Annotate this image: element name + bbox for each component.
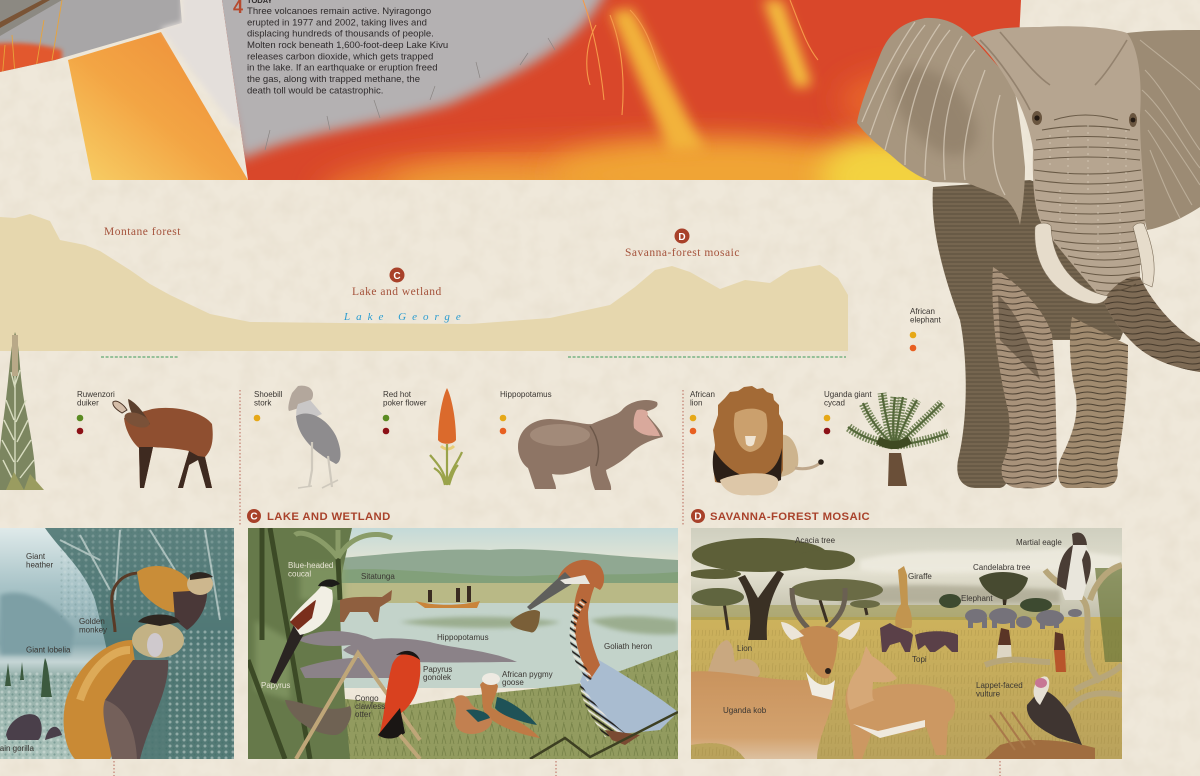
giraffe	[895, 566, 912, 628]
hills	[342, 549, 678, 576]
species: African lion: lion	[690, 398, 702, 408]
papyrus gonolek	[378, 651, 420, 759]
wooden branch frame	[296, 653, 420, 759]
species: hippopotamus: Hippopotamus	[500, 390, 552, 399]
elephant herd	[965, 608, 1082, 629]
species: Ruwenzori duiker: Ruwenzori	[77, 390, 115, 399]
near front leg	[992, 267, 1057, 488]
foreground grass	[345, 650, 678, 759]
species: African lion: African	[690, 390, 715, 399]
today text block: death toll would be catastrophic.	[247, 85, 383, 96]
label: Savanna-forest mosaic with marker D	[625, 228, 740, 259]
african pygmy geese	[453, 673, 540, 738]
species: shoebill stork	[254, 386, 340, 488]
panel: savanna-forest mosaic scene: Lappet-faced	[976, 681, 1023, 690]
sitatunga	[340, 590, 392, 622]
label: Montane forest: Montane forest	[104, 226, 181, 238]
section heading: lake and wetland: LAKE AND WETLAND	[267, 511, 391, 523]
panel: savanna-forest mosaic scene: Martial eagle	[1016, 538, 1062, 547]
candelabra and background trees	[939, 572, 1052, 612]
panel: lake and wetland scene: Papyrus	[261, 681, 290, 690]
species: Uganda giant cycad: cycad	[824, 398, 845, 408]
panel: lake and wetland scene: gonolek	[423, 673, 452, 682]
panel: lake and wetland scene: Hippopotamus	[437, 633, 489, 642]
lions	[708, 640, 760, 677]
today text block: Three volcanoes remain active. Nyiragongo	[247, 6, 431, 17]
panel: lake and wetland scene: Blue-headed	[288, 561, 333, 570]
right ear	[1127, 30, 1200, 230]
species: giant lobelia	[0, 332, 44, 490]
panel: savanna-forest mosaic scene: Topi	[912, 655, 927, 664]
panel: lake and wetland scene: Sitatunga	[361, 572, 395, 581]
panel: lake and wetland scene: otter	[355, 710, 371, 719]
panel: savanna-forest mosaic scene: Elephant	[961, 594, 993, 603]
panel: savanna-forest mosaic scene: Lion	[737, 644, 752, 653]
acacia trees	[689, 538, 883, 640]
elevation profile terrain	[0, 214, 848, 351]
tusks	[1035, 223, 1154, 304]
congo clawless otter	[285, 700, 351, 735]
label: Savanna-forest mosaic with marker D: Savanna-forest mosaic	[625, 247, 740, 259]
lava veins	[583, 0, 818, 115]
species: Ruwenzori duiker: duiker	[77, 398, 99, 408]
label: Lake George: Lake George	[343, 311, 467, 323]
papyrus thicket	[248, 528, 352, 759]
species: shoebill stork: Shoebill	[254, 390, 283, 399]
species: African lion	[690, 386, 824, 495]
panel: savanna-forest mosaic scene: Uganda kob	[723, 706, 767, 715]
pale rock strip	[161, 0, 248, 132]
panel: montane forest scene: Golden	[79, 617, 105, 626]
panel: lake and wetland scene: coucal	[288, 570, 311, 578]
gorillas	[6, 714, 62, 740]
panel: montane forest scene: heather	[26, 560, 53, 570]
panel: montane forest scene	[0, 528, 234, 759]
today text block: displacing hundreds of thousands of people.	[247, 29, 434, 40]
today text block: Molten rock beneath 1,600-foot-deep Lake Kivu	[247, 40, 448, 51]
today text block: releases carbon dioxide, which gets trapped	[247, 51, 433, 62]
panel: savanna-forest mosaic scene	[689, 528, 1122, 759]
panel: lake and wetland scene	[248, 528, 678, 759]
panel: lake and wetland scene: clawless	[355, 702, 385, 711]
volcano cross-section illustration	[0, 0, 1021, 180]
panel: montane forest scene: monkey	[79, 626, 107, 634]
panel: savanna-forest mosaic scene: Giraffe	[908, 572, 932, 581]
hunters	[996, 628, 1066, 672]
uganda kob male	[691, 588, 860, 759]
today text block	[233, 0, 448, 96]
eyes	[1032, 111, 1042, 125]
label: Lake and wetland with marker C: C	[393, 271, 401, 282]
large golden monkey	[64, 614, 184, 759]
label: Lake and wetland with marker C: Lake and wetland	[352, 286, 442, 298]
water	[340, 603, 678, 688]
goliath heron	[510, 560, 678, 745]
species: shoebill stork: stork	[254, 398, 272, 408]
panel: montane forest scene: Giant lobelia	[26, 646, 71, 654]
species: African elephant	[857, 18, 1200, 488]
lappet-faced vulture	[985, 676, 1095, 759]
fallen and dead tree branches	[1095, 568, 1122, 662]
panel: savanna-forest mosaic scene: vulture	[976, 690, 1001, 698]
section heading: lake and wetland: C	[250, 512, 258, 522]
species: hippopotamus	[500, 390, 663, 490]
species: red hot poker flower: Red hot	[383, 390, 412, 399]
panel: lake and wetland scene: Congo	[355, 694, 379, 703]
left ear	[857, 18, 1025, 225]
species: Uganda giant cycad: Uganda giant	[824, 390, 872, 399]
main magma chamber	[222, 0, 1021, 180]
fishing boat	[415, 586, 480, 608]
dark fallen branch	[530, 712, 678, 759]
species: red hot poker flower	[383, 388, 462, 485]
species: African elephant: elephant	[910, 316, 941, 324]
label: Lake and wetland with marker C	[352, 268, 442, 298]
species: African elephant: African	[910, 307, 935, 316]
martial eagle	[1057, 532, 1091, 600]
far right leg	[1058, 317, 1128, 488]
panel: lake and wetland scene: goose	[502, 678, 524, 687]
panel: savanna-forest mosaic scene: Acacia tree	[795, 536, 836, 545]
uganda kob female	[845, 646, 955, 759]
panel: savanna-forest mosaic scene: Candelabra tree	[973, 563, 1031, 572]
blue-headed coucal	[270, 579, 340, 684]
species: red hot poker flower: poker flower	[383, 398, 427, 408]
section heading: savanna-forest mosaic: SAVANNA-FOREST MOSAIC	[710, 511, 870, 523]
upper golden monkey	[112, 566, 213, 632]
panel: montane forest scene: Giant	[26, 552, 46, 561]
today text block: the gas, along with trapped methane, the	[247, 74, 420, 85]
giant lobelia plants	[5, 658, 52, 697]
panel: lake and wetland scene: Goliath heron	[604, 642, 652, 651]
dotted column dividers	[114, 390, 1000, 776]
orange magma strip	[68, 32, 248, 180]
hippos in water	[298, 631, 517, 678]
species: Ruwenzori duiker	[77, 390, 213, 488]
topi herd	[880, 623, 958, 652]
panel: lake and wetland scene: Papyrus	[423, 665, 452, 674]
head and trunk	[972, 26, 1200, 372]
today text block: in the lake. If an earthquake or eruption freed	[247, 63, 438, 74]
section heading: savanna-forest mosaic: D	[694, 512, 702, 522]
lava columns	[610, 8, 705, 152]
today text block: erupted in 1977 and 2002, taking lives and	[247, 17, 427, 28]
body and far leg	[933, 180, 1140, 488]
label: Savanna-forest mosaic with marker D: D	[678, 232, 686, 243]
species: Uganda giant cycad	[824, 390, 948, 486]
rock slab with lava, upper left	[0, 0, 182, 80]
dashed habitat extent lines	[101, 356, 846, 358]
panel: lake and wetland scene: African pygmy	[502, 670, 553, 679]
